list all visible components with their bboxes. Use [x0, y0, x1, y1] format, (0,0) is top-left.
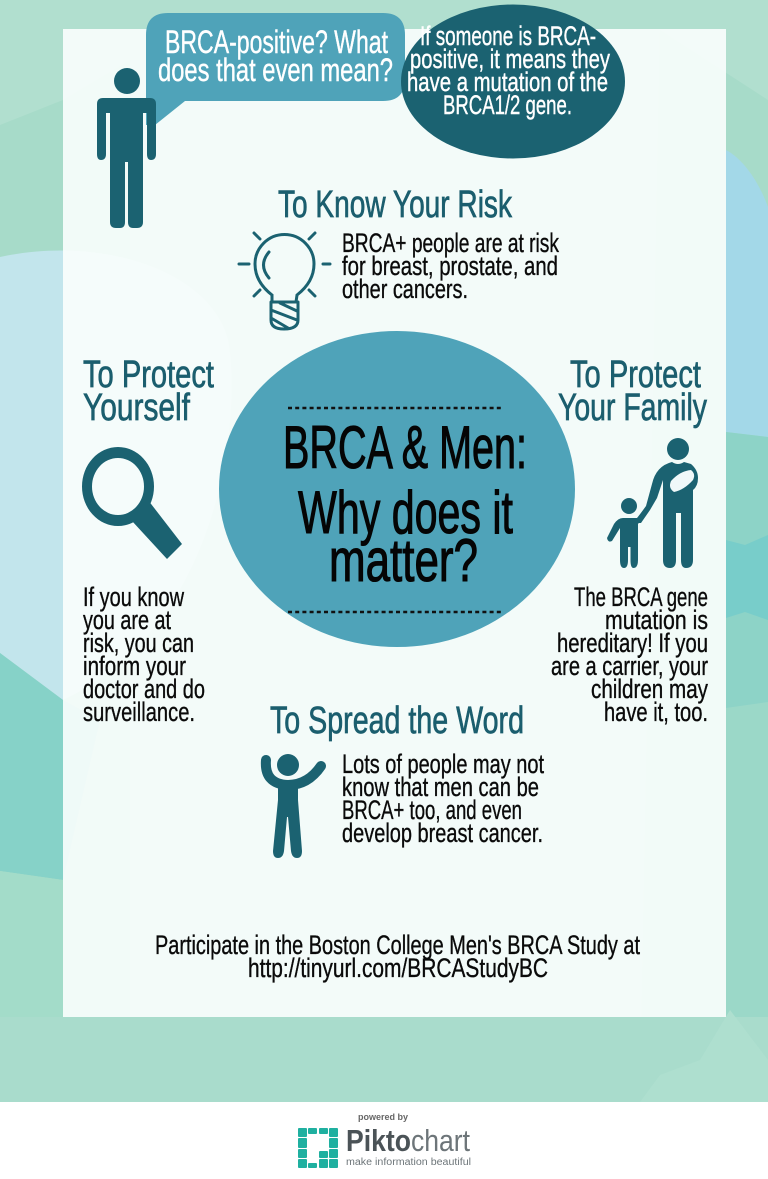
heading: to protect your family: To Protect	[570, 354, 701, 396]
text: spread the word: BRCA+ too, and even	[342, 795, 522, 825]
text: protect yourself	[83, 582, 205, 727]
text: know your risk: other cancers.	[342, 274, 468, 304]
call to action: http://tinyurl.com/BRCAStudyBC	[248, 953, 548, 983]
text: protect your family: have it, too.	[604, 697, 708, 727]
central circle title: matter?	[329, 527, 478, 594]
definition ellipse: If someone is BRCA-	[420, 21, 596, 51]
text: spread the word	[342, 749, 544, 848]
heading: to protect your family: Your Family	[558, 387, 707, 429]
text: protect your family: are a carrier, your	[551, 651, 708, 681]
icon: standing man	[97, 68, 156, 228]
text: protect yourself: surveillance.	[83, 697, 195, 727]
definition ellipse: positive, it means they	[410, 44, 611, 74]
central circle title: BRCA & Men:	[283, 414, 527, 481]
definition ellipse	[401, 4, 625, 158]
heading: to protect your family	[558, 354, 707, 429]
text: spread the word: know that men can be	[342, 772, 539, 802]
central circle title	[219, 331, 575, 647]
heading: to protect yourself: To Protect	[83, 354, 214, 396]
heading: to protect yourself	[83, 354, 214, 429]
text: protect your family	[551, 582, 709, 727]
text: protect your family: mutation is	[605, 605, 708, 635]
text: protect yourself: If you know	[83, 582, 185, 612]
text: know your risk: BRCA+ people are at risk	[342, 228, 560, 258]
text: protect your family: children may	[591, 674, 709, 704]
central circle title: Why does it	[298, 479, 513, 546]
text: protect yourself: risk, you can	[83, 628, 194, 658]
text: protect yourself: doctor and do	[83, 674, 205, 704]
piktochart logo: Piktochart	[346, 1123, 470, 1158]
heading: to spread the word: To Spread the Word	[270, 700, 524, 742]
heading: to protect yourself: Yourself	[83, 387, 190, 429]
icon: parent and child	[607, 438, 698, 568]
text: spread the word: Lots of people may not	[342, 749, 544, 779]
call to action	[155, 930, 640, 983]
text: protect yourself: you are at	[83, 605, 171, 635]
speech bubble	[146, 13, 405, 125]
text: protect yourself: inform your	[83, 651, 186, 681]
footer band	[0, 1102, 768, 1179]
piktochart logo	[298, 1112, 471, 1168]
icon: magnifying glass	[82, 447, 182, 559]
icon: person with raised arms	[266, 754, 321, 858]
definition ellipse: have a mutation of the	[407, 67, 608, 97]
speech bubble: does that even mean?	[158, 52, 393, 88]
icon: light bulb	[239, 233, 330, 329]
text: spread the word: develop breast cancer.	[342, 818, 543, 848]
definition ellipse: BRCA1/2 gene.	[443, 90, 572, 120]
text: protect your family: hereditary! If you	[557, 628, 708, 658]
piktochart logo: powered by	[358, 1112, 408, 1122]
text: know your risk: for breast, prostate, and	[342, 251, 558, 281]
heading: to know your risk: To Know Your Risk	[278, 184, 513, 226]
text: protect your family: The BRCA gene	[574, 582, 708, 612]
white content panel	[63, 29, 726, 1017]
speech bubble: BRCA-positive? What	[165, 24, 388, 60]
piktochart logo: make information beautiful	[346, 1157, 471, 1168]
text: know your risk	[342, 228, 560, 304]
